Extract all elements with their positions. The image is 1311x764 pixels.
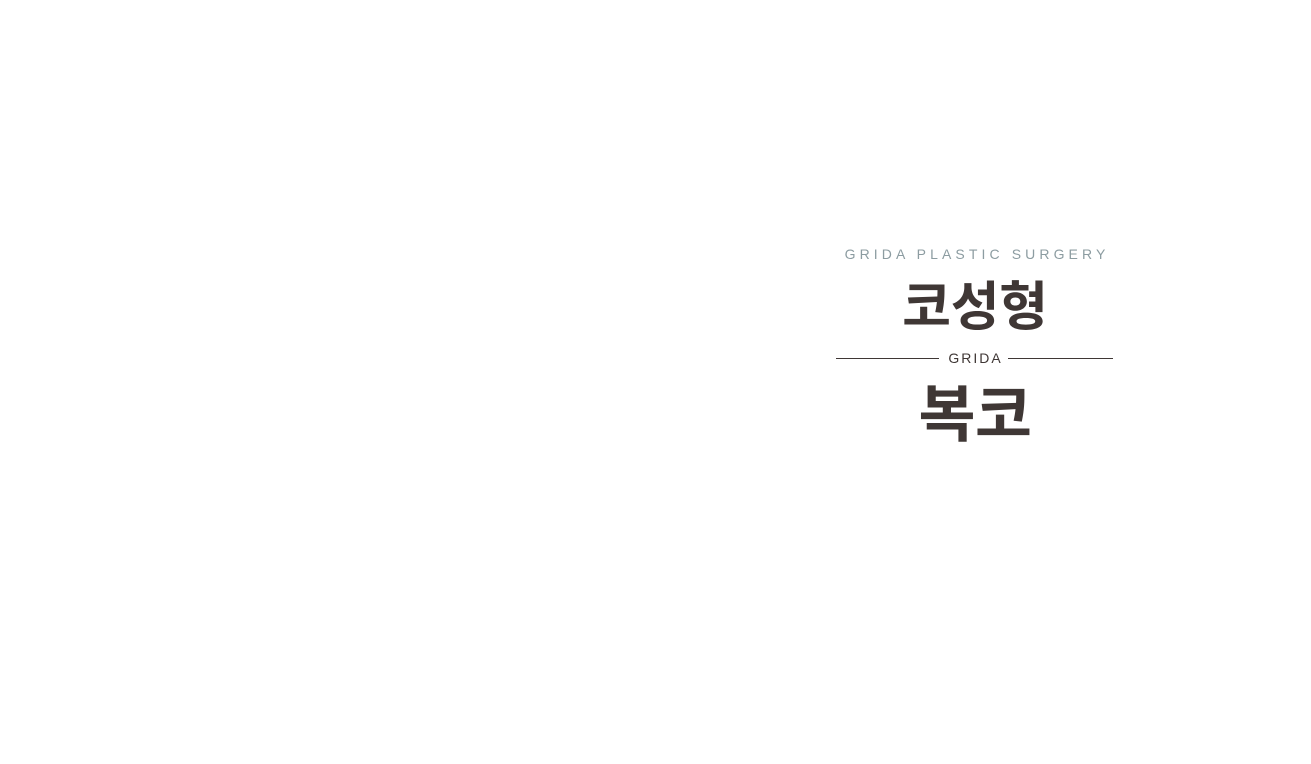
- panel: title block: [836, 246, 1113, 450]
- eyebrow text: GRIDA PLASTIC SURGERY: GRIDA PLASTIC SURGERY: [845, 246, 1109, 262]
- heading: 복코: 복코: [918, 381, 1032, 450]
- divider label: GRIDA with rules: GRIDA: [948, 350, 1003, 366]
- heading: 코성형: 코성형: [902, 278, 1048, 337]
